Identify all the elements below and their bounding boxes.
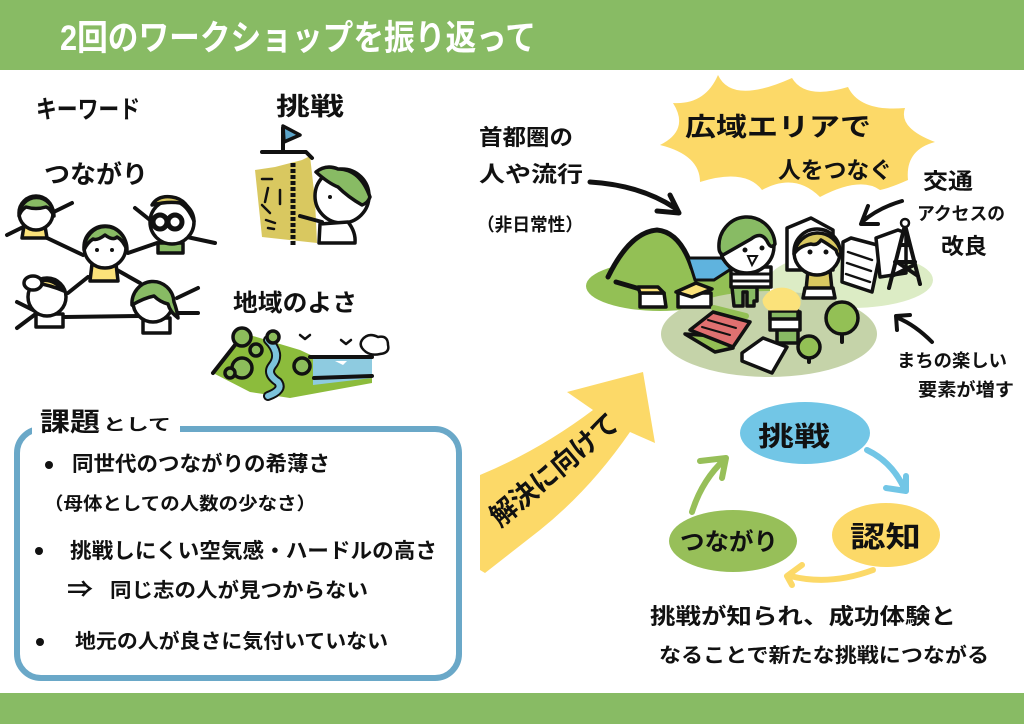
- burst callout: [660, 75, 935, 197]
- heading: issues: 課題: [40, 407, 100, 437]
- person: centre: [84, 226, 127, 281]
- heading: issues: として: [103, 416, 171, 434]
- heading: tsunagari: つながり: [44, 160, 148, 189]
- white box: [742, 338, 787, 373]
- bullet 3: 地元の人が良さに気付いていない: [75, 629, 388, 653]
- header band: [0, 0, 1024, 70]
- cycle arrow: connection to challenge: [692, 458, 726, 512]
- bullet 2 result: [67, 576, 368, 602]
- network illustration: [7, 196, 215, 333]
- illustration: climbing wall: [255, 126, 370, 245]
- person: boy: [719, 217, 775, 306]
- cycle: connection node: [669, 510, 797, 572]
- cycle: connection node: つながり: [680, 528, 778, 556]
- bullet 1: 同世代のつながりの希薄さ: [72, 452, 330, 476]
- person: child: [763, 288, 800, 343]
- cycle: challenge node: [740, 402, 870, 464]
- text: town fun: [897, 351, 1014, 400]
- cycle: challenge node: 挑戦: [758, 422, 830, 452]
- heading: issues: [40, 407, 171, 437]
- tower: [889, 219, 920, 288]
- arrow: to town elements: [896, 315, 932, 342]
- footer band: [0, 693, 1024, 724]
- mountain: [608, 230, 692, 287]
- text: metropolitan flow: 人や流行: [479, 162, 583, 187]
- buildings: [787, 218, 906, 292]
- market stall: [685, 308, 750, 352]
- small houses: [638, 283, 712, 307]
- text: transport access: [917, 169, 1005, 259]
- arrow: toward solution: 解決に向けて: [484, 407, 625, 533]
- text: transport access: アクセスの: [917, 204, 1005, 224]
- bullet 1 note: （母体としての人数の少なさ）: [44, 494, 316, 514]
- cycle: recognition node: 認知: [850, 521, 921, 554]
- heading: keywords: キーワード: [36, 96, 140, 124]
- burst callout: 広域エリアで: [685, 112, 871, 142]
- text: metropolitan flow: [477, 125, 583, 235]
- text: transport access: 改良: [941, 234, 987, 259]
- cycle: recognition node: [832, 503, 940, 567]
- heading: challenge: 挑戦: [276, 93, 344, 121]
- person: bottom right: [132, 281, 178, 333]
- bullet 2 result: 同じ志の人が見つからない: [110, 578, 368, 602]
- person: top right with glasses: [150, 197, 194, 253]
- caption: 挑戦が知られ、成功体験と: [650, 604, 956, 629]
- text: metropolitan flow: （非日常性）: [477, 215, 583, 235]
- cycle arrow: recognition to connection: [787, 565, 873, 585]
- arrow: toward solution: [480, 372, 655, 573]
- panel: issues: [17, 407, 459, 678]
- title: 2回のワークショップを振り返って: [60, 19, 536, 58]
- bullet 2: 挑戦しにくい空気感・ハードルの高さ: [70, 539, 437, 563]
- arrow: to buildings: [861, 201, 902, 224]
- person: bottom left with cap: [24, 276, 66, 327]
- pond: [688, 258, 731, 280]
- tree: [798, 302, 858, 362]
- arrow: flow into area: [590, 182, 679, 213]
- person: top left: [19, 196, 54, 238]
- text: metropolitan flow: 首都圏の: [479, 125, 573, 150]
- text: town fun: 要素が増す: [918, 379, 1014, 400]
- illustration: town scene: [586, 217, 933, 377]
- text: transport access: 交通: [923, 169, 973, 194]
- illustration: regional landscape: [213, 328, 388, 398]
- heading: regional goodness: 地域のよさ: [233, 290, 357, 317]
- burst callout: 人をつなぐ: [778, 157, 892, 183]
- person: girl: [794, 229, 841, 298]
- caption: なることで新たな挑戦につながる: [659, 643, 989, 667]
- caption: [650, 604, 989, 667]
- bullet 2 result: ⇒: [67, 576, 93, 602]
- cycle arrow: challenge to recognition: [867, 450, 906, 491]
- text: town fun: まちの楽しい: [897, 351, 1007, 371]
